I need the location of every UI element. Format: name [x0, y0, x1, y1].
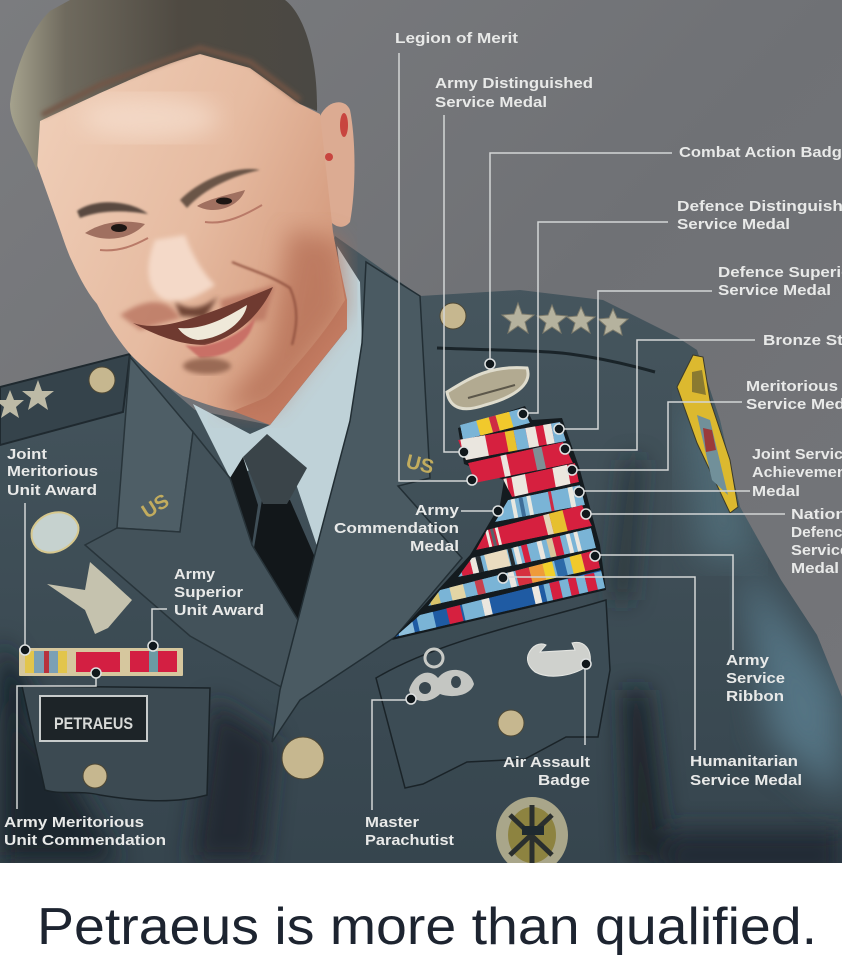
- label: Army Commendation Medal: [334, 502, 460, 555]
- jacket shading: [0, 400, 842, 880]
- label: Army Superior Unit Award: Army: [174, 566, 216, 583]
- master parachutist badge: [409, 649, 474, 701]
- label: Humanitarian Service Medal: [690, 753, 802, 789]
- uniform jacket: [0, 236, 842, 863]
- leader lines: [17, 53, 785, 810]
- label: Army Superior Unit Award: Superior: [174, 584, 243, 601]
- label: Army Commendation Medal: Medal: [410, 538, 459, 555]
- ribbon backing: [392, 406, 606, 640]
- label: Army Service Ribbon: Service: [726, 670, 785, 687]
- label: Master Parachutist: Master: [365, 814, 419, 831]
- label: Army Superior Unit Award: [174, 566, 264, 619]
- eyebrows: [77, 202, 148, 218]
- label: Defence Distinguished Service Medal: [677, 198, 842, 233]
- left shoulder stars: [0, 380, 54, 418]
- ribbon row 7: [457, 525, 596, 603]
- label: Defence Superior Service Medal: [718, 264, 842, 299]
- label: Army Commendation Medal: Commendation: [334, 520, 459, 537]
- general staff badge: [496, 797, 568, 873]
- left collar tab: [117, 357, 193, 532]
- chin shadow: [183, 358, 231, 374]
- label: Air Assault Badge: [503, 754, 590, 789]
- air assault badge: [527, 642, 590, 676]
- ear: [320, 102, 354, 227]
- US collar pins: US: [138, 490, 173, 523]
- label: Defence Superior Service Medal: Service Medal: [718, 282, 831, 299]
- epaulet line right: [437, 348, 655, 372]
- label: Defence Superior Service Medal: Defence Superior: [718, 264, 842, 281]
- buttons: [83, 303, 524, 788]
- right pocket flap: [376, 600, 610, 788]
- mouth: [133, 287, 273, 345]
- right lapel: [272, 262, 462, 742]
- ribbon row 3: [468, 442, 573, 489]
- shirt: [193, 246, 362, 546]
- tie: [230, 434, 317, 630]
- four stars: [502, 303, 628, 335]
- ribbon row 5: [495, 484, 585, 535]
- ribbon row 1: [460, 406, 530, 454]
- ribbon row 8: [427, 547, 608, 638]
- label: Joint Meritorious Unit Award: Unit Award: [7, 482, 97, 499]
- label: Joint Meritorious Unit Award: Joint: [7, 446, 47, 463]
- label: Combat Action Badge: Combat Action Badge: [679, 144, 842, 161]
- smile fold: [232, 262, 296, 345]
- caption: Petraeus is more than qualified.: [37, 898, 817, 956]
- label: Defence Distinguished Service Medal: Service Medal: [677, 216, 790, 233]
- label: Air Assault Badge: Badge: [538, 772, 590, 789]
- label: Master Parachutist: [365, 814, 454, 849]
- name plate: PETRAEUS: [54, 714, 133, 733]
- ribbon row 2: [458, 413, 569, 472]
- label: Army Service Ribbon: Army: [726, 652, 770, 669]
- label: Defence Distinguished Service Medal: Defence Distinguished: [677, 198, 842, 215]
- label: Army Service Ribbon: Ribbon: [726, 688, 784, 705]
- hair: [10, 0, 317, 171]
- label: Army Distinguished Service Medal: Service Medal: [435, 94, 547, 111]
- US collar pins: [140, 454, 434, 517]
- label: National Defence Service Medal: Medal: [791, 560, 839, 577]
- label: Meritorious Service Medal: [746, 378, 842, 413]
- combat action badge: [447, 368, 528, 409]
- under eye creases: [100, 205, 262, 250]
- label: Humanitarian Service Medal: Humanitarian: [690, 753, 798, 770]
- lower lip: [185, 318, 255, 358]
- parachute wings pin: [47, 562, 132, 634]
- label: Army Service Ribbon: [726, 652, 785, 705]
- label: Army Superior Unit Award: Unit Award: [174, 602, 264, 619]
- teeth: [178, 305, 247, 340]
- label: Joint Meritorious Unit Award: [7, 446, 98, 499]
- leader dots: [20, 359, 600, 704]
- eye pupils: [111, 198, 232, 232]
- label: Air Assault Badge: Air Assault: [503, 754, 590, 771]
- label: National Defence Service Medal: [791, 506, 842, 577]
- label: Legion of Merit: Legion of Merit: [395, 30, 518, 47]
- label: Humanitarian Service Medal: Service Medal: [690, 772, 802, 789]
- neck: [232, 240, 347, 425]
- unit crest: [32, 512, 78, 553]
- label: Joint Meritorious Unit Award: Meritorious: [7, 463, 98, 480]
- forehead highlight: [80, 96, 220, 140]
- label: Joint Service Achievement Medal: Medal: [752, 483, 800, 500]
- cheek shading: [220, 230, 345, 410]
- ribbon row 9: [395, 568, 627, 667]
- chest ribbons: [392, 406, 627, 667]
- ribbon row 4: [502, 460, 579, 510]
- left ribbon bar: [19, 648, 183, 676]
- left epaulet fill: [0, 354, 130, 445]
- shoulder patch: [677, 355, 738, 513]
- ribbon row 6: [476, 505, 592, 569]
- nose: [148, 235, 218, 318]
- label: Army Distinguished Service Medal: Army Distinguished: [435, 75, 593, 92]
- left lapel: [85, 432, 304, 692]
- left pocket flap: [22, 686, 210, 801]
- cheek and lip shading: [120, 285, 275, 330]
- label: Army Distinguished Service Medal: [435, 75, 593, 111]
- label: Army Meritorious Unit Commendation: Unit Commendation: [4, 832, 166, 849]
- label: Master Parachutist: Parachutist: [365, 832, 454, 849]
- label: Army Meritorious Unit Commendation: Army Meritorious: [4, 814, 144, 831]
- US collar pins: US: [404, 451, 436, 479]
- eyes: [85, 222, 145, 239]
- face: [37, 54, 345, 411]
- name plate: [40, 696, 147, 741]
- label: Meritorious Service Medal: Meritorious: [746, 378, 838, 395]
- label: Army Meritorious Unit Commendation: [4, 814, 166, 849]
- label: Army Commendation Medal: Army: [415, 502, 460, 519]
- label: Joint Service Achievement Medal: [752, 446, 842, 500]
- hairline shadow: [42, 48, 300, 115]
